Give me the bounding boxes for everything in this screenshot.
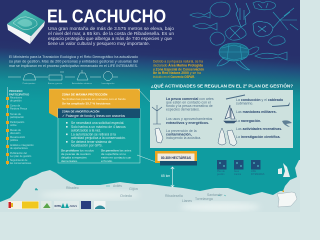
QR codes: LIFE	[251, 171, 256, 173]
map place names: Ribadesella	[165, 194, 183, 198]
harmonisation zone: autorizados a la vez.	[71, 128, 101, 132]
text: left column activities: extractivos y energéticos.	[166, 121, 209, 125]
participatory process timeline: Curso de	[10, 104, 21, 108]
map place names: Avilés	[113, 184, 122, 188]
harmonisation zone: actividad perjudica a la conservación.	[71, 136, 126, 140]
participatory process timeline: PROCESO	[9, 89, 22, 93]
harmonisation zone: Se deberá tener sistema de	[71, 140, 112, 144]
harmonisation zone: de superficie si no	[101, 152, 126, 156]
icon: sailboat	[224, 105, 236, 123]
regulated activities heading: ¿QUÉ ACTIVIDADES SE REGULAN EN EL 2º PLAN DE GESTIÓN?	[151, 82, 293, 90]
text: right column activities: La conducción y el cableado	[236, 98, 283, 102]
distance arrow 65 km: 65 km	[161, 174, 170, 178]
maximum protection zone	[49, 89, 140, 118]
logo: INTEMARES: ARES	[70, 204, 77, 208]
harmonisation zone: Se prohíben los modos	[61, 148, 94, 152]
protection status callout	[153, 60, 204, 79]
icon: plane	[272, 102, 290, 107]
map place names	[66, 184, 224, 203]
icon: wind turbine	[152, 105, 162, 124]
harmonisation zone: el fondo.	[101, 159, 113, 163]
participatory process timeline: pública	[10, 139, 19, 142]
harmonisation zone	[58, 108, 140, 163]
participatory process timeline: de aportaciones	[10, 147, 29, 150]
logos strip	[8, 201, 106, 210]
text: right column activities: Las maniobras militares.	[236, 110, 277, 114]
harmonisation zone: de pescas de reunión	[61, 152, 91, 156]
map place names: Llanes	[182, 199, 192, 203]
text: left column activities: que estén en contacto con el	[166, 100, 211, 104]
QR codes	[217, 160, 265, 176]
map: coast and land	[0, 160, 300, 212]
protection status callout: declarado Área Marina Protegida	[153, 62, 203, 68]
text: left column activities: fondo y la pesca recreativa de	[166, 104, 213, 108]
text: right column activities	[236, 98, 283, 139]
harmonisation zone: La autorización se retirará si la	[71, 132, 116, 136]
QR codes: Plan de	[217, 171, 226, 173]
icon row: participation process: Participantes	[23, 82, 36, 85]
harmonisation zone: están en contacto con	[101, 156, 132, 160]
marine life line art	[190, 2, 298, 70]
hectares badge: 80.389 HECTÁREAS	[161, 155, 191, 160]
participatory process timeline: Pardeza Pesca	[10, 108, 28, 110]
intro text	[48, 26, 175, 46]
participatory process timeline: las conversaciones	[10, 162, 32, 165]
harmonisation zone: ✓ Palangre de fondo y lineas con anzuelos	[62, 114, 125, 118]
maximum protection zone: Se ha ampliado 35,7 % hectáreas	[62, 102, 111, 106]
text: left column activities: incluyendo la acústica.	[166, 136, 201, 140]
logo: Biodiversidad	[41, 201, 52, 209]
participatory process timeline: Mesas de	[10, 129, 21, 132]
panel: regulated activities	[150, 90, 293, 148]
participatory process timeline: discusión	[10, 132, 21, 135]
logo: INTEMARES	[54, 201, 79, 209]
harmonisation zone: ZONA DE AMORTIGUACIÓN	[62, 108, 99, 114]
logo: EU	[81, 201, 91, 209]
text: left column activities: La pesca comercial con artes	[166, 97, 214, 101]
text: right column activities: La navegación.	[236, 119, 261, 123]
logo: Spanish government	[8, 201, 39, 209]
intro text: Una gran montaña de más de 3.575 metros se eleva, bajo	[48, 26, 175, 31]
harmonisation zone: Se permiten las artes	[101, 148, 132, 152]
participatory process timeline: de gestión	[10, 100, 22, 102]
management plan paragraph: El Ministerio para la Transición Ecológica y el Reto Demográfico ha actualizado	[9, 55, 138, 59]
participatory process timeline: PARTICIPATIVO	[9, 92, 29, 96]
icon row: participation process: Actividades náuticas	[72, 82, 93, 85]
QR codes: gestión	[217, 173, 225, 176]
participatory process timeline: Participación	[10, 121, 25, 124]
hectares badge	[155, 151, 197, 166]
maximum protection zone: Se limitan las pescas en contacto con el fondo	[62, 97, 126, 101]
protection status callout: de la Red Natura 2000 y se ha	[153, 71, 201, 75]
intro text: el nivel del mar, a 65 km. de la costa de Ribadesella. Es un	[48, 31, 175, 36]
zoning panels	[49, 89, 140, 163]
protection status callout: Debido a su riqueza natural, se ha	[153, 60, 203, 64]
harmonisation zone: localización por GPS.	[71, 144, 103, 148]
map place names: Santander	[207, 193, 224, 197]
harmonisation zone: demersales.	[61, 159, 78, 163]
participatory process timeline: participación	[10, 116, 25, 119]
harmonisation zone: Se necesitará una solicitud especial.	[71, 121, 124, 125]
participatory process timeline	[6, 87, 34, 165]
participatory process timeline: Análisis e integración	[10, 144, 34, 147]
icon: contaminated bottle	[155, 128, 163, 143]
icon: seamount block diagram	[7, 10, 45, 44]
text: left column activities: especies demersales.	[166, 108, 200, 112]
map place names: Ribadeo	[66, 186, 79, 190]
management plan paragraph: mar se implicaron en el proceso participativo enmarcado en el LIFE INTEMARES.	[9, 64, 138, 68]
QR codes: marina	[234, 173, 242, 176]
logo: Fundación	[94, 201, 106, 210]
icon: fish group	[190, 12, 287, 60]
participatory process timeline: Publicación del	[10, 152, 27, 155]
connector lines	[137, 89, 156, 162]
protection status callout: incluido en el Convenio OSPAR.	[153, 75, 195, 79]
harmonisation zone: dirigida a especies	[61, 156, 87, 160]
icon: diver	[282, 120, 292, 127]
text: left column activities: Los usos y aprovechamientos	[166, 117, 213, 121]
icon: sea turtle	[217, 43, 259, 70]
participatory process timeline: online	[10, 124, 17, 127]
QR codes: Área	[234, 170, 240, 173]
participatory process timeline: Mesa/reunión	[10, 136, 26, 139]
management plan paragraph	[9, 55, 138, 68]
title: EL CACHUCHO	[47, 6, 166, 26]
icon row: participation process: Investigación	[102, 82, 115, 85]
text: right column activities: submarino.	[236, 102, 253, 106]
text: right column activities: Las actividades recreativas.	[236, 127, 282, 131]
distance arrow 65 km	[161, 167, 174, 187]
intro text: tiene un valor cultural y pesquero muy importante.	[48, 41, 150, 46]
text: left column activities	[166, 97, 214, 140]
icon: cable	[226, 95, 245, 99]
participatory process timeline: Temas de	[10, 113, 21, 116]
participatory process timeline: Reuniones	[10, 96, 23, 100]
icon row: participation process: Buceo y pesca	[48, 83, 63, 85]
map place names: Gijón	[129, 187, 138, 191]
text: right column activities: La investigación científica.	[236, 135, 280, 139]
management plan paragraph: su plan de gestión. Más de 200 personas y entidades gestoras y usuarias del	[9, 60, 138, 64]
text: left column activities: La prevención de la	[166, 129, 197, 133]
participatory process timeline: 1er plan de gestión	[10, 155, 32, 158]
harmonisation zone: Solo harina a un máximo de 4 barcos	[71, 125, 126, 129]
QR codes: INTEMARES	[251, 173, 265, 176]
maximum protection zone: ZONA DE MÁXIMA PROTECCIÓN	[62, 92, 107, 96]
text: left column activities: contaminación,	[166, 132, 192, 136]
map place names: Oviedo	[120, 194, 132, 198]
protection status callout: y Zona Especial de Conservación	[153, 68, 204, 72]
icon row: participation process	[8, 70, 118, 85]
icon: corals and invertebrates	[210, 2, 298, 45]
icon: buoys and fins	[218, 128, 237, 146]
map place names: Torrelavega	[195, 197, 213, 201]
logo: INTEMARES: INTE	[54, 204, 61, 208]
participatory process timeline: Seguimiento de	[10, 159, 28, 162]
intro text: espacio protegido que alberga a más de 740 especies y que	[48, 36, 173, 41]
